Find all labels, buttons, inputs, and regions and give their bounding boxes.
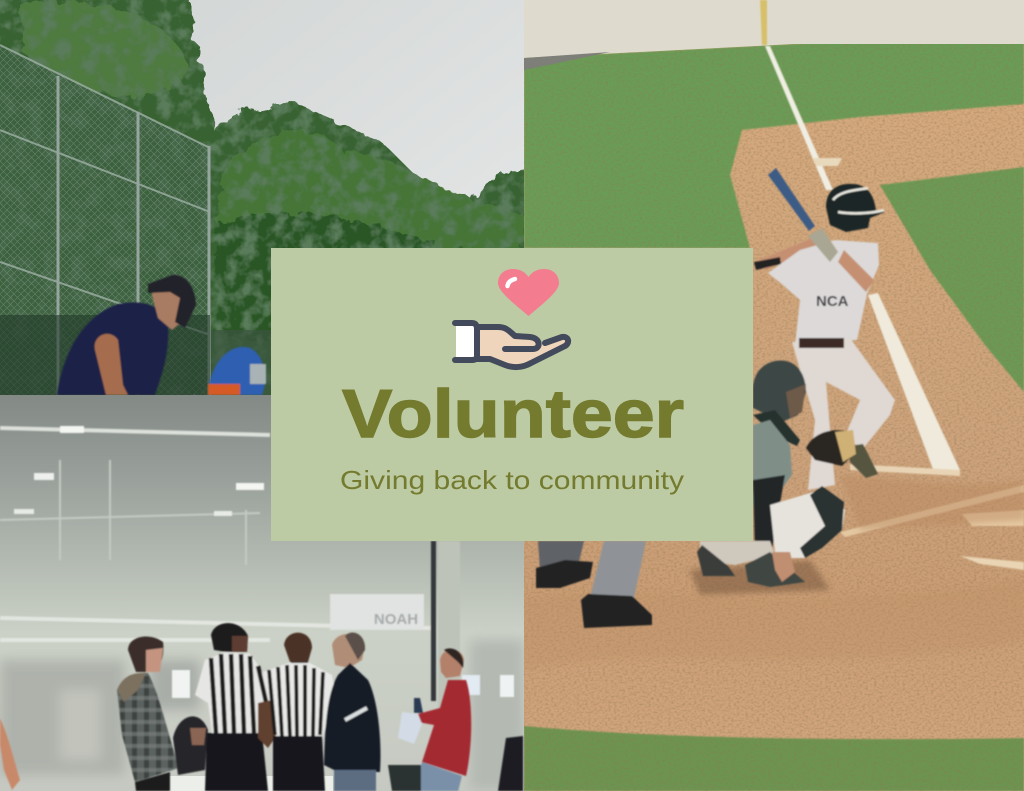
photo: referees in gym: [0, 395, 524, 791]
people: [0, 623, 523, 791]
trash bin: [388, 765, 421, 791]
photo: batter and catcher on the diamond: [524, 0, 1024, 791]
icon: heart: [498, 269, 559, 316]
referee 1: [211, 623, 248, 652]
seated person: [173, 716, 208, 775]
outfield grass: [524, 32, 1024, 248]
photo: umpire and catcher by the fence: [0, 0, 540, 400]
boy in plaid: [128, 636, 163, 672]
chalk foul line: [765, 46, 833, 190]
batter: [755, 238, 818, 270]
man in red: [440, 650, 464, 678]
batter helmet: [826, 184, 885, 232]
panel: title card: [271, 248, 753, 541]
umpire legs: [538, 541, 584, 570]
bat: [768, 168, 815, 231]
referee 2: [284, 633, 312, 662]
tagline: Giving back to community: [340, 465, 684, 495]
umpire: [57, 275, 266, 395]
catcher: [753, 360, 806, 422]
man in dark jacket: [332, 634, 365, 668]
photo: batter and catcher on the diamond: NCA: [816, 293, 849, 310]
icon: open hand: [455, 323, 568, 367]
chain-link fence: [0, 45, 210, 395]
heading: Volunteer: [342, 376, 684, 452]
photo: referees in gym: NOAH: [374, 611, 418, 628]
chair: [498, 736, 523, 791]
